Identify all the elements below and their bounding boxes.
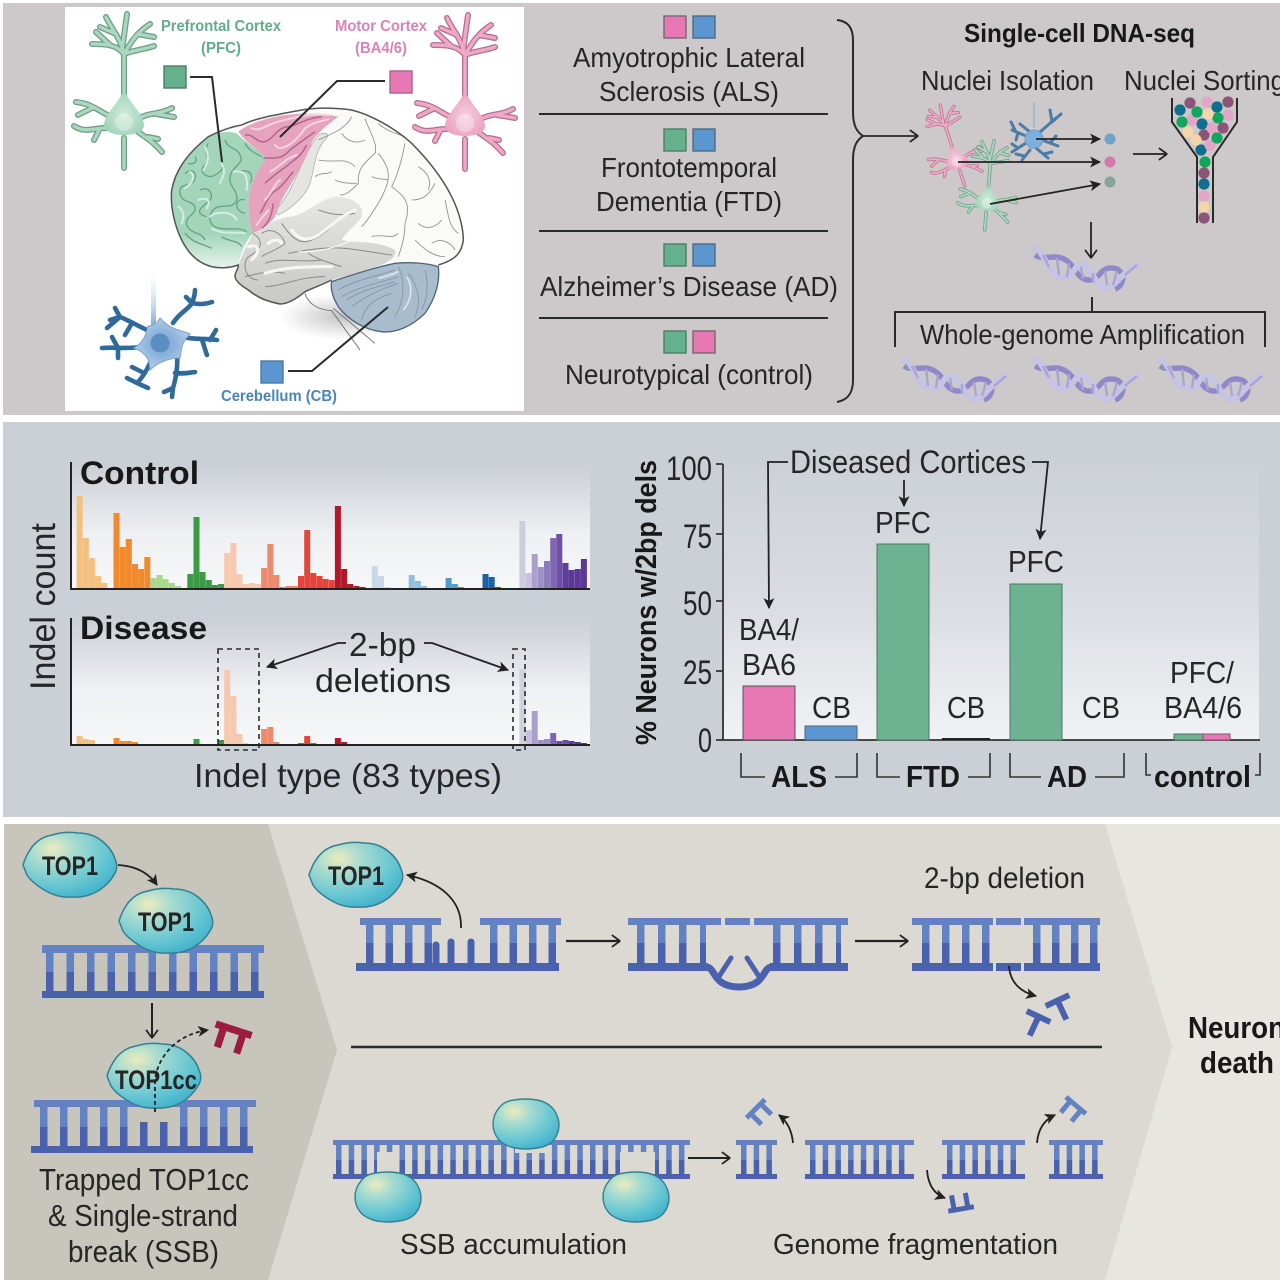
heading: Whole-genome Amplification: Whole-genome Amplification bbox=[920, 319, 1245, 350]
DNA: deleted ladder bbox=[912, 918, 1100, 971]
row: ALS: Sclerosis (ALS) bbox=[599, 76, 779, 107]
outcome: Neuron death bbox=[1188, 1010, 1280, 1080]
bar: FTD cerebellum bbox=[942, 738, 990, 740]
label: 2-bp deletion: 2-bp deletion bbox=[924, 862, 1085, 895]
DNA: ladder with many breaks bbox=[333, 1140, 690, 1179]
caption: Trapped TOP1cc: Trapped TOP1cc bbox=[39, 1162, 249, 1197]
protein: released TOP1 bbox=[309, 842, 403, 907]
key: green square with leader bbox=[164, 66, 222, 162]
icon: sorting funnel bbox=[1172, 96, 1237, 224]
label: Motor Cortex: (BA4/6) bbox=[355, 40, 407, 57]
proteins: TOP1 on breaks bbox=[355, 1099, 669, 1222]
arrow bbox=[566, 940, 620, 942]
group labels with brackets bbox=[741, 753, 1260, 794]
protein: TOP1cc bbox=[107, 1043, 201, 1108]
icon: blue cerebellar neuron bbox=[102, 265, 217, 397]
bar labels: BA4/ bbox=[739, 612, 799, 647]
axis title: percent neurons: % Neurons w/2bp dels bbox=[631, 460, 663, 745]
arrow: TOP1 binding bbox=[118, 865, 157, 885]
bar: ALS cerebellum bbox=[805, 726, 857, 740]
caption: Trapped TOP1cc bbox=[39, 1162, 249, 1269]
callout: 2-bp deletions: deletions bbox=[315, 662, 451, 699]
bar: ALS motor cortex bbox=[743, 686, 795, 740]
background chevrons bbox=[4, 824, 1280, 1280]
DNA: intact ladder bbox=[42, 945, 264, 998]
label: Disease: Disease bbox=[80, 610, 207, 646]
chart: disease indel spectrum bbox=[71, 618, 590, 745]
protein: bound TOP1 bbox=[119, 888, 213, 953]
arrow: isolation to sorting bbox=[1133, 153, 1167, 155]
row: ALS bbox=[573, 16, 805, 107]
axis title: Indel type: Indel type (83 types) bbox=[194, 757, 502, 794]
arrow bbox=[855, 940, 908, 942]
callout: 2-bp deletions bbox=[267, 626, 508, 699]
row: control bbox=[565, 331, 813, 390]
callout: 2-bp deletions: 2-bp bbox=[349, 626, 416, 663]
row: FTD bbox=[596, 129, 782, 217]
bar: FTD PFC bbox=[877, 544, 929, 740]
bars: disease bbox=[77, 669, 587, 744]
icon: isolated nuclei bbox=[1104, 134, 1116, 188]
heading: Nuclei Isolation: Nuclei Isolation bbox=[921, 65, 1094, 96]
dashed highlight boxes bbox=[218, 649, 525, 750]
caption: Trapped TOP1cc: break (SSB) bbox=[68, 1234, 219, 1269]
y axis: 25 bbox=[683, 654, 712, 692]
group labels with brackets: ALS bbox=[771, 759, 827, 794]
row: ALS: Amyotrophic Lateral bbox=[573, 42, 805, 73]
row: FTD: Frontotemporal bbox=[601, 152, 777, 183]
bar labels: BA4/6 bbox=[1164, 690, 1242, 725]
icon: red cleaved fragment bbox=[209, 1024, 252, 1056]
y axis: 50 bbox=[683, 585, 712, 623]
arrow bbox=[688, 1157, 730, 1159]
heading: Single-cell DNA-seq: Single-cell DNA-seq bbox=[964, 18, 1195, 48]
callout: Diseased Cortices bbox=[768, 444, 1048, 608]
label: Prefrontal Cortex: Prefrontal Cortex bbox=[161, 18, 281, 35]
illustration: brain bbox=[171, 108, 463, 350]
arrows: neurons to nuclei bbox=[958, 139, 1100, 204]
y axis: 0 bbox=[698, 722, 712, 760]
bar labels bbox=[739, 505, 1242, 725]
DNA: nicked ladder bbox=[356, 918, 561, 971]
DNA: fragments bbox=[736, 1142, 1103, 1176]
icon: removed nucleotides bbox=[1018, 995, 1078, 1041]
protein: released TOP1: TOP1 bbox=[328, 861, 384, 891]
arrow: nucleotides removed bbox=[1009, 966, 1036, 996]
divider bbox=[351, 1046, 1102, 1048]
row: FTD: Dementia (FTD) bbox=[596, 186, 782, 217]
panel: indel signatures and neuron percentages bbox=[3, 422, 1280, 817]
bar labels: CB bbox=[812, 690, 851, 725]
bracket: amplification bbox=[895, 297, 1265, 347]
caption: SSB accumulation: SSB accumulation bbox=[400, 1229, 627, 1261]
arrow: down bbox=[151, 1003, 153, 1038]
icon: pink pyramidal neuron bbox=[415, 15, 515, 169]
stage 1: trapped TOP1cc bbox=[23, 832, 264, 1269]
label: Motor Cortex: Motor Cortex bbox=[335, 18, 427, 35]
row: AD bbox=[540, 244, 838, 302]
brace and arrow bbox=[837, 20, 918, 402]
bar labels: CB bbox=[1082, 690, 1120, 725]
panel: TOP1 mechanism bbox=[4, 824, 1280, 1280]
bar labels: PFC/ bbox=[1170, 655, 1234, 690]
list: disease cohorts bbox=[539, 16, 838, 390]
group labels with brackets: FTD bbox=[906, 759, 960, 794]
icon: green pyramidal neuron bbox=[74, 14, 174, 168]
row: control: Neurotypical (control) bbox=[565, 359, 813, 390]
axis title: Indel count: Indel count bbox=[24, 523, 63, 690]
bars: control bbox=[77, 496, 587, 588]
caption: Genome fragmentation: Genome fragmentation bbox=[773, 1229, 1058, 1261]
stage 3: SSB accumulation and fragmentation bbox=[333, 1097, 1103, 1261]
key: pink square with leader bbox=[280, 71, 412, 137]
panel: brain regions and single-cell sequencing bbox=[3, 3, 1280, 415]
label: Cerebellum: Cerebellum (CB) bbox=[221, 388, 337, 405]
arrow: TOP1 leaves bbox=[407, 875, 461, 928]
callout: Diseased Cortices: Diseased Cortices bbox=[790, 444, 1026, 480]
group labels with brackets: control bbox=[1154, 759, 1251, 794]
bar: AD PFC bbox=[1010, 584, 1062, 740]
row: AD: Alzheimer’s Disease (AD) bbox=[540, 271, 838, 302]
y axis: 100 bbox=[666, 450, 712, 488]
chart: control indel spectrum bbox=[71, 462, 590, 589]
arrow: dashed release bbox=[155, 1030, 208, 1112]
DNA: ladder with break bbox=[31, 1100, 256, 1153]
label: Motor Cortex bbox=[335, 18, 427, 57]
bar labels: PFC bbox=[875, 505, 931, 540]
bar chart: neurons with 2-bp deletions bbox=[666, 450, 1260, 760]
bar labels: BA6 bbox=[742, 647, 796, 682]
icon: released fragments with arrows bbox=[747, 1097, 1086, 1211]
protein: free TOP1 bbox=[23, 832, 117, 897]
y axis: 75 bbox=[683, 518, 712, 556]
panel: brain illustration bbox=[65, 7, 524, 411]
caption: Trapped TOP1cc: & Single-strand bbox=[48, 1198, 238, 1233]
icon: amplified DNA helices bbox=[902, 360, 1264, 400]
arrow: sorting to DNA bbox=[1090, 222, 1092, 258]
label: Prefrontal Cortex bbox=[161, 18, 281, 57]
stage 2: 2-bp deletion pathway bbox=[309, 842, 1100, 1041]
protein: TOP1cc: TOP1cc bbox=[115, 1065, 197, 1095]
label: Prefrontal Cortex: (PFC) bbox=[201, 40, 241, 57]
bar labels: PFC bbox=[1008, 544, 1064, 579]
label: Control: Control bbox=[80, 455, 199, 491]
protein: bound TOP1: TOP1 bbox=[138, 907, 194, 937]
bar: control bbox=[1174, 734, 1230, 740]
y axis bbox=[666, 450, 1260, 760]
key: blue square with leader bbox=[261, 307, 388, 383]
DNA: looped ladder bbox=[628, 918, 848, 987]
protein: free TOP1: TOP1 bbox=[42, 851, 98, 881]
icon: DNA helix bbox=[1033, 249, 1139, 289]
icon: small neurons bbox=[912, 97, 1061, 232]
group labels with brackets: AD bbox=[1047, 759, 1087, 794]
bar labels: CB bbox=[947, 690, 985, 725]
